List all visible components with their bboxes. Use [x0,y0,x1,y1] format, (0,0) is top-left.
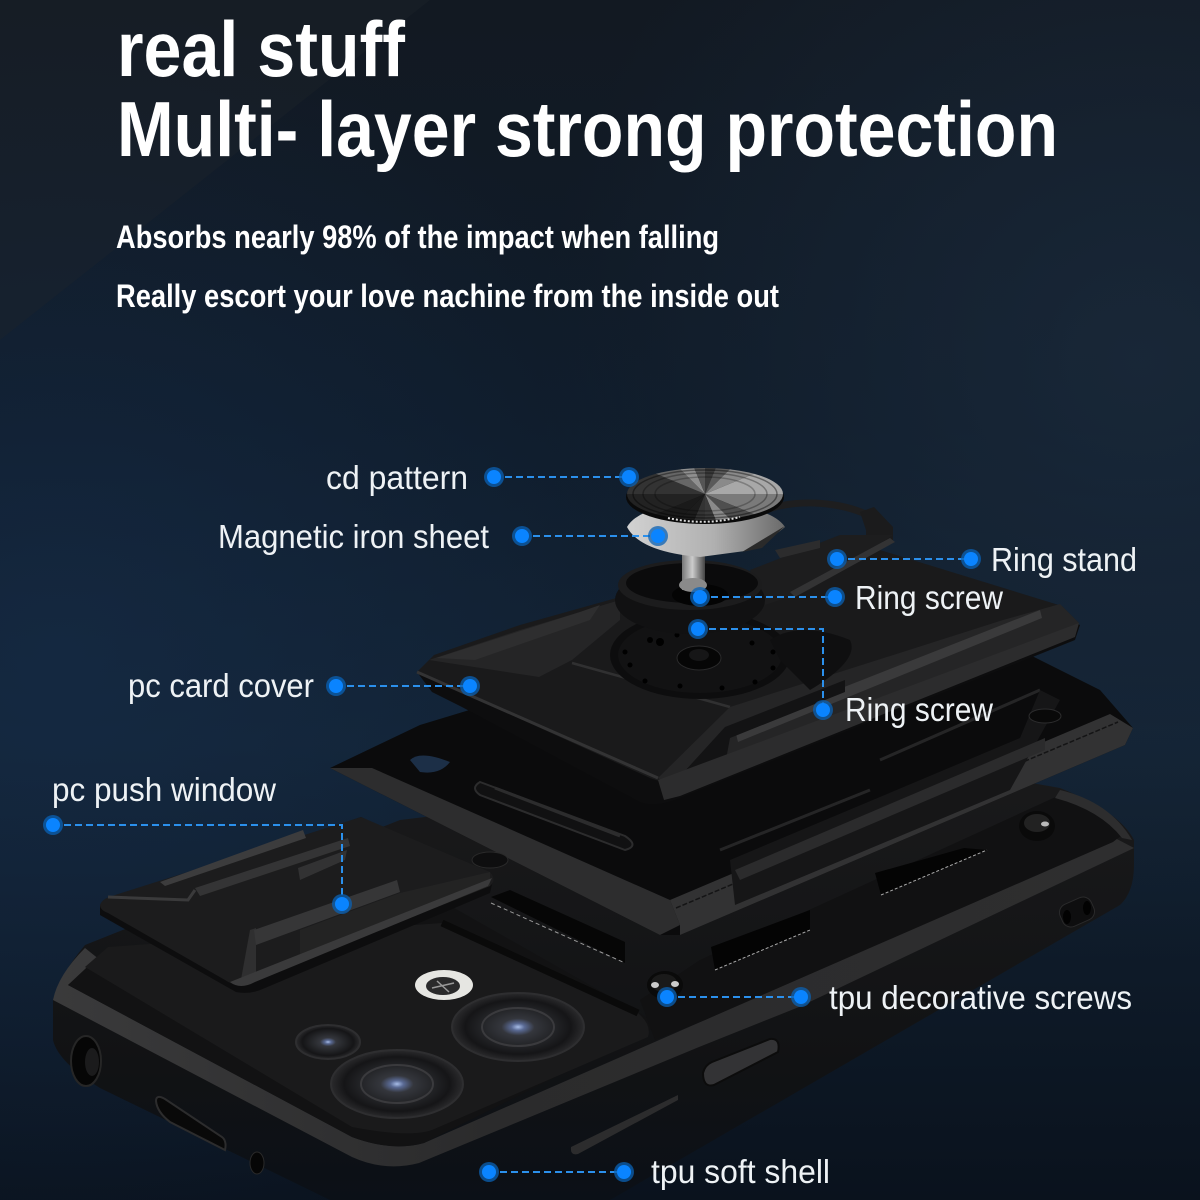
magnetic iron sheet [627,503,785,557]
callout: ring screw upper: Ring screw [855,579,1003,616]
callout: pc card cover [128,667,480,704]
callout: ring stand [827,541,1137,578]
ring stand [750,503,895,690]
ring seat disc [615,560,765,634]
camera plate [85,923,649,1133]
subtitle text: Really escort your love nachine from the inside out [116,278,779,314]
title: real stuff [117,5,406,93]
pc push window [100,817,494,993]
callout: pc push window [43,771,352,914]
callout: ring stand: Ring stand [991,541,1137,578]
flash [415,970,473,1000]
subtitle text [116,219,779,314]
subtitle text: Absorbs nearly 98% of the impact when falling [116,219,719,255]
ring screw pin [679,545,707,592]
phone case exploded view [53,394,1134,1200]
callout: cd pattern: cd pattern [326,459,468,496]
callout: pc card cover: pc card cover [128,667,314,704]
callout: magnetic iron sheet: Magnetic iron sheet [218,518,489,555]
title [117,5,1058,173]
camera lenses [296,993,584,1118]
mesh vents [491,848,987,970]
decorative screws [647,811,1055,999]
side ports [71,894,1097,1174]
callout: tpu decorative screws: tpu decorative screws [829,979,1132,1016]
callout: pc push window: pc push window [52,771,276,808]
pc card cover [417,550,1080,804]
callout: ring screw lower: Ring screw [845,691,993,728]
callout: cd pattern [326,459,639,496]
callout: tpu soft shell: tpu soft shell [651,1153,830,1190]
callout: tpu decorative screws [657,979,1132,1016]
callout: ring screw upper [690,579,1003,616]
callout: magnetic iron sheet [218,518,668,555]
title: Multi- layer strong protection [117,85,1058,173]
cd pattern disc [626,468,784,524]
tpu soft shell body [53,760,1134,1200]
callout: tpu soft shell [479,1153,830,1190]
perforated camera seat [610,611,790,699]
middle pc frame [330,640,1133,935]
callout: ring screw lower [688,619,993,728]
